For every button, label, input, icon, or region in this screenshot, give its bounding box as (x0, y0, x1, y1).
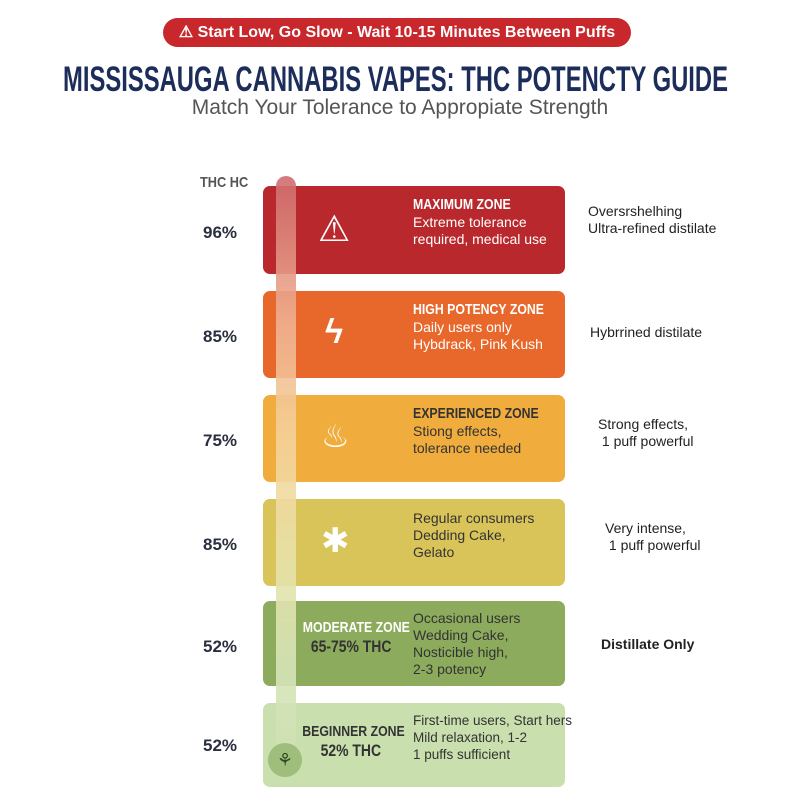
zone: regular: Gelato (413, 544, 454, 560)
right notes: Hybrrined distilate (590, 324, 702, 340)
right notes (588, 203, 716, 652)
percent labels: 85% (203, 535, 237, 554)
zone: regular (263, 499, 565, 586)
zone: beginner: Mild relaxation, 1-2 (413, 730, 527, 745)
zone: moderate: Nosticible high, (413, 644, 508, 660)
zone: beginner: First-time users, Start hers (413, 713, 572, 728)
subtitle: Match Your Tolerance to Appropiate Strength (192, 96, 608, 119)
zone: beginner: 1 puffs sufficient (413, 747, 510, 762)
percent labels: 75% (203, 431, 237, 450)
zone: moderate (263, 601, 565, 686)
zone: high potency: Hybdrack, Pink Kush (413, 336, 543, 352)
zone: experienced: EXPERIENCED ZONE (413, 405, 539, 422)
zone: maximum: MAXIMUM ZONE (413, 196, 511, 213)
icon: warning: ⚠ (318, 208, 350, 249)
percent labels: 85% (203, 327, 237, 346)
zone: moderate: MODERATE ZONE (303, 619, 410, 636)
zone: regular: Dedding Cake, (413, 527, 506, 543)
zone: maximum (263, 186, 565, 274)
icon: sprout: ⚘ (277, 750, 293, 770)
zone: beginner: BEGINNER ZONE (302, 723, 405, 740)
icon: lightning: ϟ (325, 313, 343, 351)
zone: moderate: 65-75% THC (311, 637, 391, 656)
right notes: Ultra-refined distilate (588, 220, 716, 236)
zone: high potency: HIGH POTENCY ZONE (413, 301, 544, 318)
right notes: Oversrshelhing (588, 203, 682, 219)
zone: maximum: Extreme tolerance (413, 214, 527, 230)
right notes: Strong effects, (598, 416, 688, 432)
percent labels: 52% (203, 637, 237, 656)
icon: sprout (268, 743, 302, 777)
zone: maximum: required, medical use (413, 231, 547, 247)
warning pill: ⚠ Start Low, Go Slow - Wait 10-15 Minutes Between Puffs (179, 24, 615, 41)
right notes: Very intense, (605, 520, 686, 536)
zone: experienced: tolerance needed (413, 440, 521, 456)
thermometer bar (276, 176, 296, 756)
icon: leaf: ✱ (321, 522, 350, 560)
zone: moderate: 2-3 potency (413, 661, 486, 677)
axis label: THC HC (200, 174, 248, 191)
percent labels: 96% (203, 223, 237, 242)
percent labels: 52% (203, 736, 237, 755)
zone: beginner: 52% THC (321, 741, 381, 760)
zone: high potency (263, 291, 565, 378)
right notes: Distillate Only (601, 636, 694, 652)
right notes: 1 puff powerful (609, 537, 700, 553)
icon: flame: ♨ (321, 418, 350, 454)
zone: regular: Regular consumers (413, 510, 534, 526)
zone: moderate: Occasional users (413, 610, 520, 626)
percent labels (203, 223, 237, 755)
right notes: 1 puff powerful (602, 433, 693, 449)
zone: moderate: Wedding Cake, (413, 627, 508, 643)
zone: beginner (263, 703, 565, 787)
zone: high potency: Daily users only (413, 319, 512, 335)
zone: experienced (263, 395, 565, 482)
zone: experienced: Stiong effects, (413, 423, 501, 439)
warning pill (163, 18, 631, 47)
